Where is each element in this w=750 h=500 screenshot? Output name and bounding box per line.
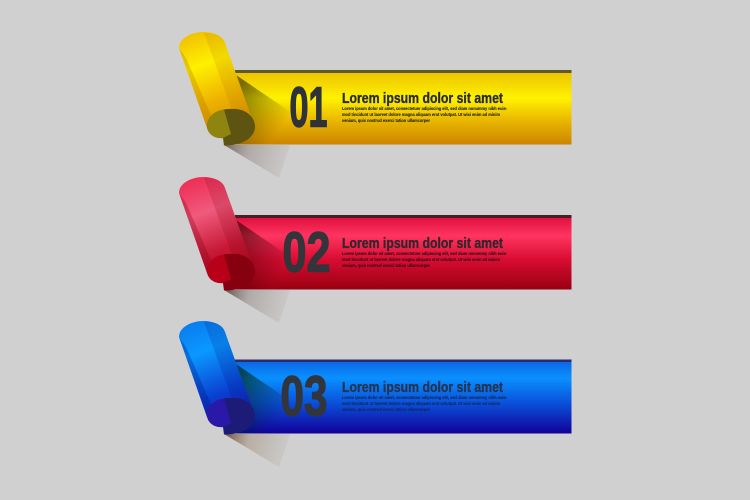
red roll: [179, 177, 255, 291]
body text 02: Lorem ipsum dolor sit amet, consectetuer adipiscing elit, sed diam nonummy nibh euis-: [342, 251, 507, 257]
cast shadow under red ribbon: [224, 290, 290, 323]
red roll right facet: [204, 178, 255, 272]
yellow roll: [179, 32, 255, 146]
heading 03: Lorem ipsum dolor sit amet: [342, 379, 503, 396]
yellow roll end lip: [207, 110, 231, 138]
body text 02: [342, 251, 507, 269]
number 03: 03: [280, 364, 328, 428]
blue roll: [179, 321, 255, 435]
blue band: [235, 360, 572, 434]
blue roll body: [179, 321, 255, 427]
banner 02: red: [179, 177, 572, 323]
body text 03: [342, 395, 507, 413]
body text 01: mod tincidunt ut laoreet dolore magna aliquam erat volutpat. Ut wisi enim ad minim: [342, 112, 500, 118]
red roll left shade: [179, 193, 214, 273]
red fold shadow: [232, 220, 292, 290]
yellow band: [235, 70, 572, 144]
red band top edge: [235, 215, 572, 218]
body text 03: Lorem ipsum dolor sit amet, consectetuer adipiscing elit, sed diam nonummy nibh euis-: [342, 395, 507, 401]
yellow roll right facet: [204, 33, 255, 127]
cast shadow under blue ribbon: [224, 434, 290, 467]
yellow roll body: [179, 32, 255, 138]
body text 01: Lorem ipsum dolor sit amet, consectetuer adipiscing elit, sed diam nonummy nibh euis-: [342, 106, 507, 112]
heading 02: Lorem ipsum dolor sit amet: [342, 235, 503, 252]
yellow fold shadow: [232, 75, 292, 144]
heading 01: Lorem ipsum dolor sit amet: [342, 90, 503, 107]
body text 02: mod tincidunt ut laoreet dolore magna aliquam erat volutpat. Ut wisi enim ad minim: [342, 257, 500, 263]
yellow roll left shade: [179, 48, 214, 128]
blue roll end lip: [207, 398, 231, 427]
banner 03: blue: [179, 321, 572, 467]
body text 03: veniam, quis nostrud exerci tation ullamcorper: [342, 407, 430, 413]
blue roll end: [207, 398, 255, 435]
body text 03: mod tincidunt ut laoreet dolore magna aliquam erat volutpat. Ut wisi enim ad minim: [342, 401, 500, 407]
number 01: 01: [290, 76, 328, 140]
blue fold shadow: [232, 364, 292, 434]
red roll body: [179, 177, 255, 283]
blue roll left shade: [179, 337, 214, 417]
body text 02: veniam, quis nostrud exerci tation ullamcorper: [342, 263, 430, 269]
number 02: 02: [282, 220, 330, 284]
blue band top edge: [235, 360, 572, 362]
banner 01: yellow: [179, 32, 572, 178]
red band: [235, 215, 572, 290]
yellow roll end: [207, 109, 255, 146]
body text 01: [342, 106, 507, 124]
blue roll right facet: [204, 322, 255, 416]
yellow band top edge: [235, 70, 572, 73]
red roll end lip: [207, 254, 231, 283]
cast shadow under yellow ribbon: [224, 145, 290, 178]
body text 01: veniam, quis nostrud exerci tation ullamcorper: [342, 118, 430, 124]
red roll end: [207, 254, 255, 291]
